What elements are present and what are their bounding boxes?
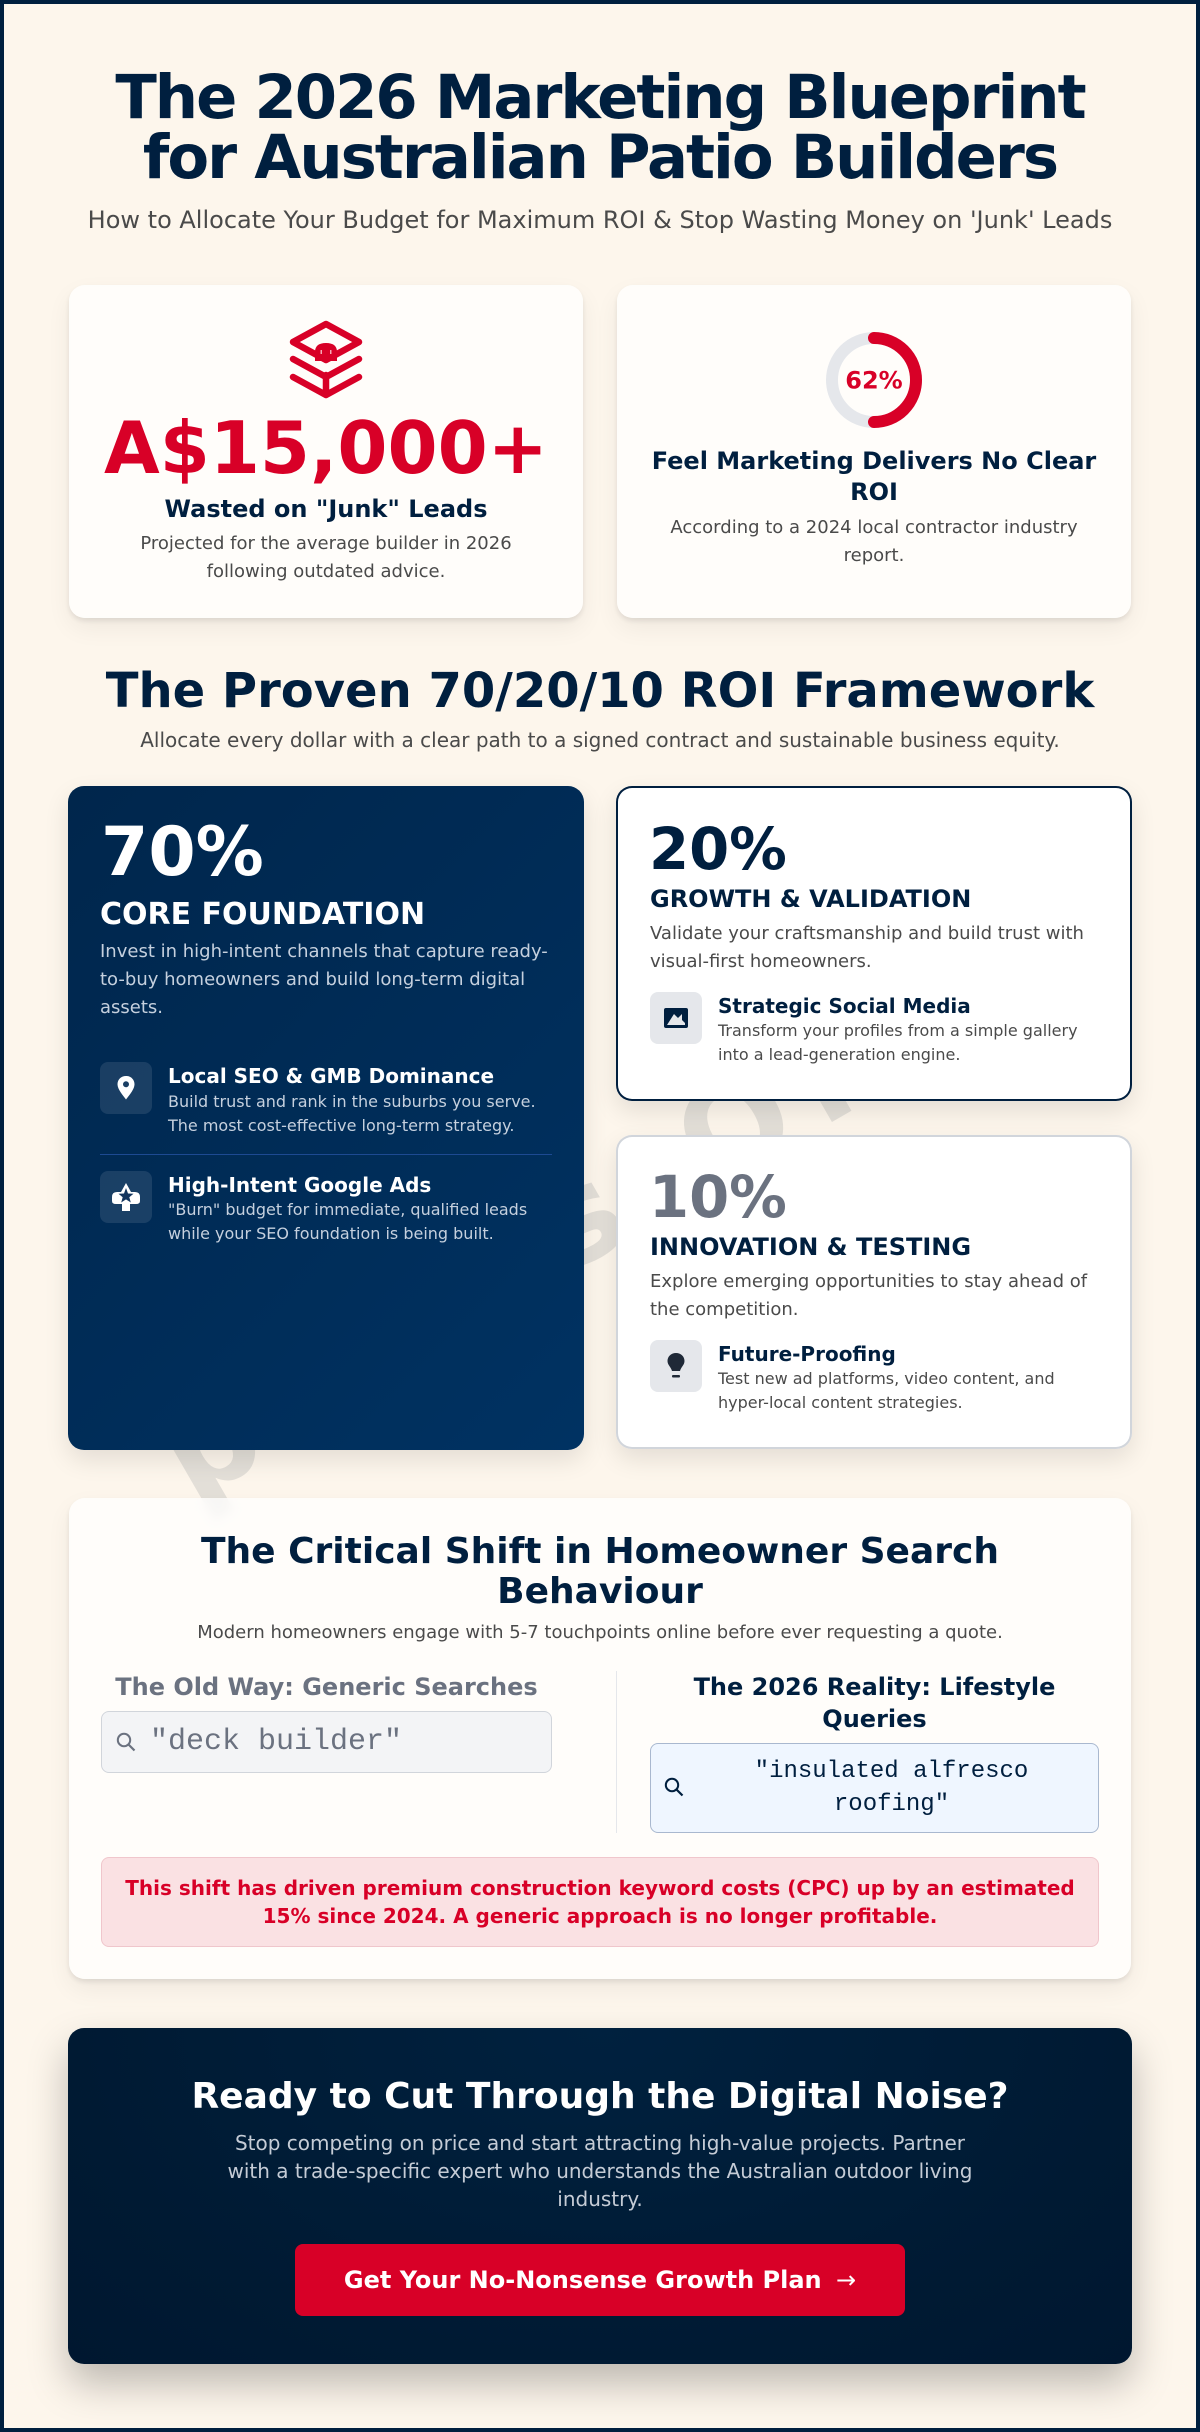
column: old way [101,1673,552,1773]
item title: Local SEO & GMB Dominance [168,1064,494,1088]
callout: CPC warning: This shift has driven premium construction keyword costs (CPC) up by an estimated [125,1876,1075,1900]
description: visual-first homeowners. [650,951,872,972]
item description: Test new ad platforms, video content, and [718,1369,1055,1388]
column heading: The 2026 Reality: Lifestyle [694,1673,1055,1701]
item description: The most cost-effective long-term strategy. [168,1116,514,1134]
item title: High-Intent Google Ads [168,1173,431,1197]
column: 2026 reality [650,1673,1099,1833]
button [295,2244,905,2316]
divider [100,1154,552,1155]
description [100,941,548,1018]
stat description [670,517,1078,566]
item description: Transform your profiles from a simple gallery [718,1021,1078,1040]
list item: future-proofing [650,1340,1055,1412]
section subheading: Allocate every dollar with a clear path to a signed contract and sustainable business equity. [140,728,1060,752]
watermark: O [651,1036,820,1219]
column heading: Queries [822,1705,927,1733]
description: assets. [100,997,163,1018]
list item: local SEO [100,1062,536,1134]
watermark: . [762,1002,878,1155]
item description [168,1092,536,1134]
column heading: The Old Way: Generic Searches [115,1673,538,1701]
description: with a trade-specific expert who understands the Australian outdoor living [228,2159,972,2183]
panel: wasted on junk leads stat [69,285,583,618]
title [115,62,1086,193]
item description: while your SEO foundation is being built. [168,1224,494,1243]
stat label: Feel Marketing Delivers No Clear [652,446,1096,474]
stat label [652,446,1096,506]
description: industry. [557,2187,643,2211]
icon: ads star [100,1171,152,1223]
big number: A$15,000+ [104,406,548,490]
divider [616,1671,617,1833]
list item: strategic social media [650,992,1078,1064]
percentage: 70% [101,813,264,892]
description: Validate your craftsmanship and build trust with [650,923,1084,944]
search box: insulated alfresco roofing [650,1743,1099,1833]
description: the competition. [650,1299,798,1320]
donut chart: 62 percent: 62% [845,366,903,394]
search box: deck builder [101,1711,552,1773]
heading: CORE FOUNDATION [100,897,425,932]
heading: Behaviour [497,1570,703,1612]
heading: GROWTH & VALIDATION [650,885,971,913]
stat label: ROI [850,478,898,506]
item description [168,1200,527,1243]
description [650,1271,1088,1320]
description: Explore emerging opportunities to stay ahead of [650,1271,1087,1292]
item description: Build trust and rank in the suburbs you serve. [168,1092,536,1110]
panel: critical shift in search behaviour [69,1498,1131,1979]
heading: INNOVATION & TESTING [650,1233,971,1261]
stat description: According to a 2024 local contractor industry [670,517,1078,538]
description: to-buy homeowners and build long-term digital [100,969,525,990]
column heading [694,1673,1055,1733]
subtitle: How to Allocate Your Budget for Maximum ROI & Stop Wasting Money on 'Junk' Leads [88,206,1112,234]
search text: "insulated alfresco [755,1758,1028,1785]
icon: magnifier [664,1778,684,1796]
item description: "Burn" budget for immediate, qualified leads [168,1200,527,1219]
button: Get Your No-Nonsense Growth Plan → [344,2266,856,2294]
stat description [140,533,512,582]
search text: "deck builder" [150,1725,402,1759]
item description: hyper-local content strategies. [718,1393,963,1412]
description [228,2131,972,2211]
percentage: 20% [649,816,787,883]
heading [201,1530,999,1612]
panel: call to action [68,2028,1132,2364]
panel: 70 percent core foundation [68,786,584,1450]
donut chart: 62 percent [826,332,922,428]
item description [718,1021,1078,1064]
panel: 20 percent growth and validation [616,786,1132,1101]
stat description: report. [844,545,904,566]
title: The 2026 Marketing Blueprint [115,62,1085,132]
watermark: s [510,1134,650,1301]
icon: magnifier [116,1732,136,1752]
stat description: following outdated advice. [207,561,445,582]
icon: light bulb [650,1340,702,1392]
panel: no clear ROI stat [617,285,1131,618]
callout: CPC warning [101,1857,1099,1947]
panel: 10 percent innovation and testing [616,1135,1132,1449]
callout: CPC warning: 15% since 2024. A generic approach is no longer profitable. [263,1904,937,1928]
title: for Australian Patio Builders [143,123,1057,193]
item description [718,1369,1055,1412]
search text: roofing" [834,1790,949,1818]
list item: google ads [100,1171,527,1243]
item title: Future-Proofing [718,1342,896,1366]
stat description: Projected for the average builder in 2026 [140,533,512,554]
watermark: p [133,1355,287,1530]
heading: Ready to Cut Through the Digital Noise? [191,2076,1009,2116]
section heading: The Proven 70/20/10 ROI Framework [106,662,1094,718]
subheading: Modern homeowners engage with 5-7 touchpoints online before ever requesting a quote. [197,1622,1003,1643]
item description: into a lead-generation engine. [718,1045,960,1064]
icon: location pin [100,1062,152,1114]
icon: image [650,992,702,1044]
icon: layered stack [290,320,362,398]
description: Stop competing on price and start attracting high-value projects. Partner [235,2131,965,2155]
heading: The Critical Shift in Homeowner Search [201,1530,999,1572]
description: Invest in high-intent channels that capture ready- [100,941,548,962]
description [650,923,1084,972]
percentage: 10% [649,1164,787,1231]
search text [755,1758,1028,1818]
item title: Strategic Social Media [718,994,971,1018]
stat label: Wasted on "Junk" Leads [165,495,487,523]
